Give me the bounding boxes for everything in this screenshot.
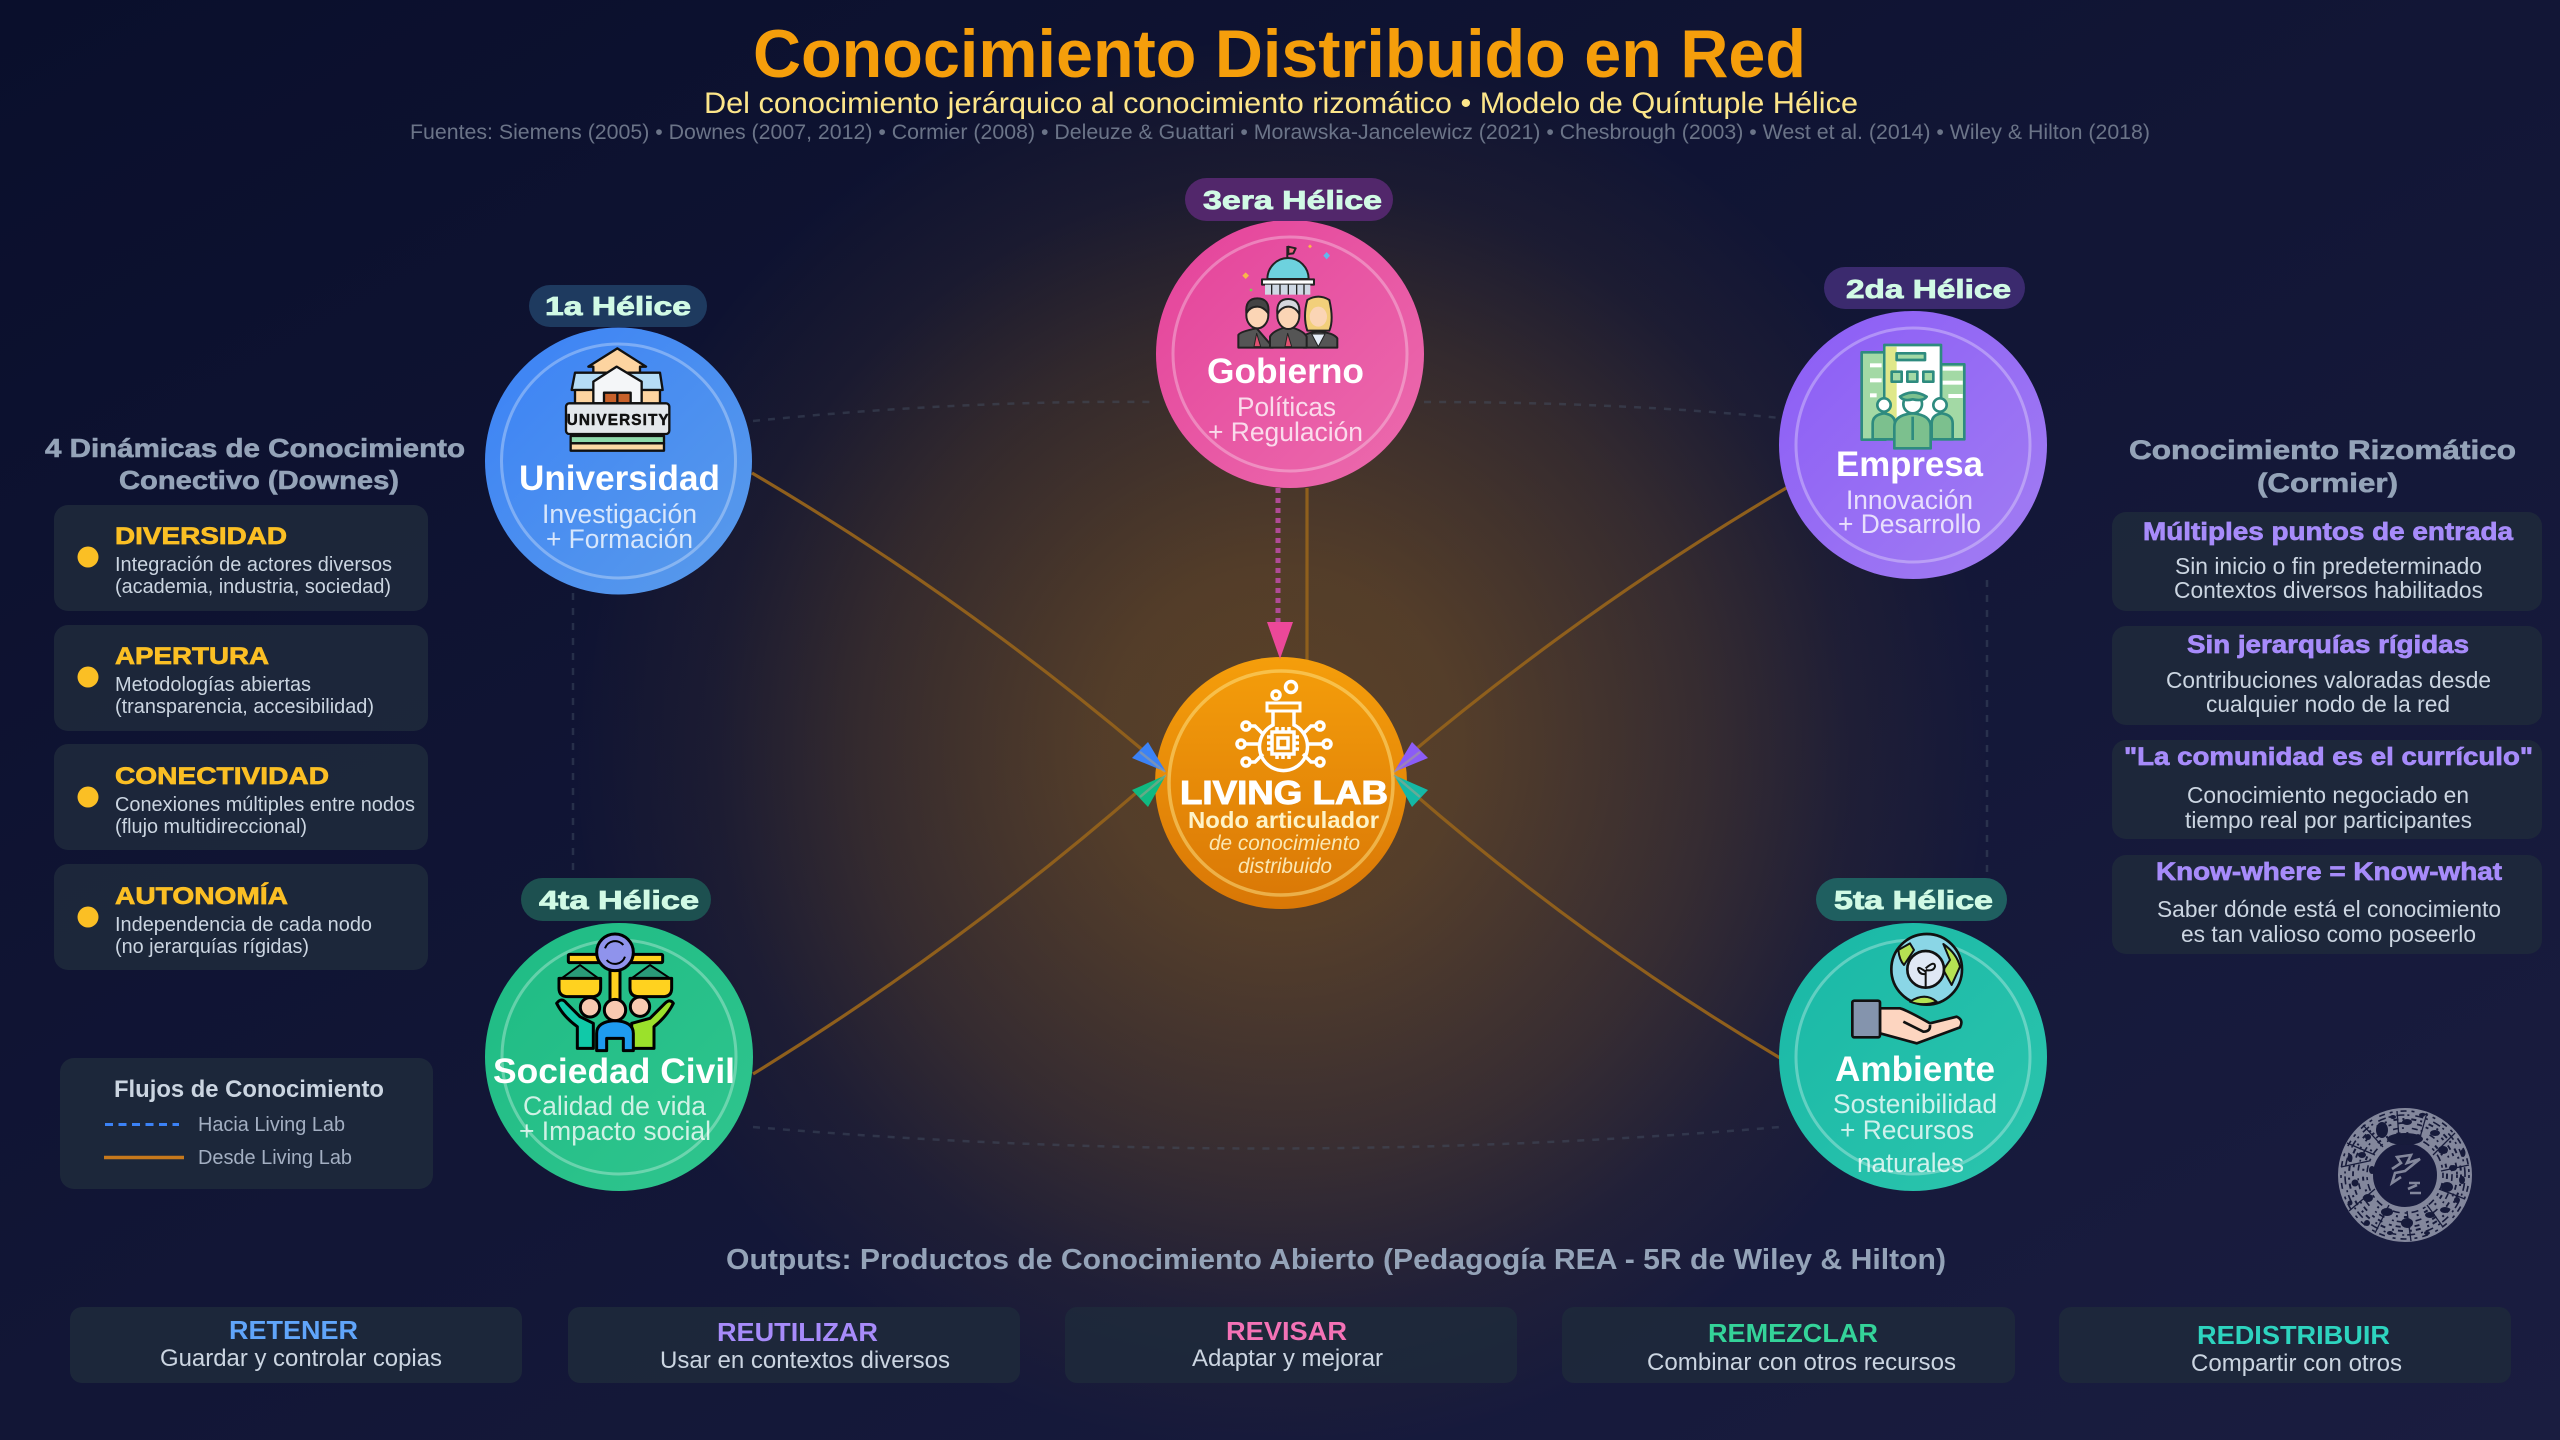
pill: 3era Hélice [1185,178,1393,221]
card: la comunidad: "La comunidad es el currículo" [2124,743,2533,771]
sublabel [1838,485,1981,539]
icon: university: UNIVERSITY [567,412,669,429]
card: apertura: (transparencia, accesibilidad) [115,696,374,718]
heading: Conectivo (Downes) [119,465,399,495]
heading: Conocimiento Rizomático [2129,435,2516,465]
card: sin jerarquías: cualquier nodo de la red [2206,691,2450,717]
sublabel: Políticas [1237,392,1336,422]
heading [2129,435,2516,498]
card: la comunidad [2112,740,2542,839]
sublabel: Sostenibilidad [1833,1089,1997,1119]
heading: Outputs: Productos de Conocimiento Abierto (Pedagogía REA - 5R de Wiley & Hilton) [726,1244,1946,1276]
card: retener [70,1307,522,1383]
sublabel: de conocimiento distribuido: de conocimiento [1209,832,1360,855]
dotted flow: Gobierno to Living Lab [1276,488,1280,625]
card: múltiples puntos [2112,512,2542,611]
node: Ambiente [1779,878,2047,1191]
subtitle: Del conocimiento jerárquico al conocimiento rizomático • Modelo de Quíntuple Hélice [704,87,1858,120]
title block [410,16,2150,144]
title: Conocimiento Distribuido en Red [753,16,1806,92]
legend: flujos: Flujos de Conocimiento [114,1076,384,1103]
label: Sociedad Civil: Sociedad Civil [493,1052,735,1091]
sublabel [1208,392,1363,447]
sublabel: de conocimiento distribuido [1209,832,1360,878]
arrow: Sociedad [1132,775,1166,807]
sublabel: Investigación [542,499,697,529]
card: revisar: Adaptar y mejorar [1192,1345,1383,1372]
icon: flask with chip [1237,682,1331,771]
arrows into Living Lab [1132,622,1428,807]
card: retener: Guardar y controlar copias [160,1345,442,1372]
card: remezclar: REMEZCLAR [1708,1318,1878,1348]
sources: Fuentes: Siemens (2005) • Downes (2007, 2012) • Cormier (2008) • Deleuze & Guattari • Morawska-Jancelewicz (2021) • Chesbrough (2003) • West et al. (2014) • Wiley & Hilton (2018) [410,121,2150,144]
pill: 5ta Hélice: 5ta Hélice [1834,885,1993,915]
card: sin jerarquías [2112,626,2542,725]
sublabel: nodo articulador: Nodo articulador [1188,807,1379,833]
card: redistribuir: Compartir con otros [2191,1350,2402,1377]
card: remezclar: Combinar con otros recursos [1647,1349,1956,1376]
label: Ambiente: Ambiente [1835,1050,1995,1089]
card: retener: RETENER [229,1315,358,1345]
node: Empresa [1779,267,2047,579]
card: apertura: Metodologías abiertas [115,674,311,696]
card: reutilizar: REUTILIZAR [717,1317,878,1347]
panel: 4 dinámicas [45,433,465,970]
icon: society [557,934,673,1051]
network: dotted links between helices [573,402,1987,1149]
card: sin jerarquías: Contribuciones valoradas desde [2166,667,2491,693]
sublabel: + Formación [546,524,693,554]
arrow: Ambiente [1394,775,1428,807]
node: Living Lab [1155,657,1407,909]
node: Gobierno [1156,178,1424,488]
card: apertura [54,625,428,731]
icon: environment [1852,934,1962,1043]
card: autonomía: Independencia de cada nodo [115,914,372,936]
icon: university [566,348,669,451]
sublabel: Calidad de vida [523,1091,707,1121]
card: know-where: es tan valioso como poseerlo [2181,921,2476,947]
arrow: Universidad [1132,742,1166,772]
node: Sociedad Civil [485,878,753,1191]
card: autonomía: AUTONOMÍA [115,882,288,910]
card: know-where: Know-where = Know-what [2156,858,2503,886]
sublabel [1833,1089,1997,1178]
heading: (Cormier) [2257,468,2398,498]
card: diversidad: DIVERSIDAD [115,523,287,550]
knowledge flow lines [752,473,1788,1074]
card: la comunidad: Conocimiento negociado en [2187,782,2469,808]
card: reutilizar: Usar en contextos diversos [660,1347,950,1374]
card: conectividad [54,744,428,850]
sublabel [519,1091,711,1146]
card: conectividad: Conexiones múltiples entre nodos [115,794,415,816]
sublabel: naturales [1857,1148,1964,1178]
heading [45,433,465,495]
pill: 2da Hélice [1824,267,2025,309]
card: conectividad: CONECTIVIDAD [115,763,329,790]
card: know-where [2112,855,2542,954]
pill: 4ta Hélice [521,878,711,921]
sublabel: de conocimiento distribuido: distribuido [1238,855,1332,878]
legend: flujos [60,1058,433,1189]
pill: 2da Hélice: 2da Hélice [1846,274,2011,304]
arrow: Gobierno [1267,622,1293,659]
pill: 3era Hélice: 3era Hélice [1203,185,1382,215]
card: apertura: APERTURA [115,643,269,670]
card: la comunidad: tiempo real por participantes [2185,807,2472,833]
node: Universidad [485,285,752,594]
label: Universidad: Universidad [519,459,720,498]
section: outputs [70,1244,2511,1383]
pill: 4ta Hélice: 4ta Hélice [539,885,699,915]
sublabel: + Desarrollo [1838,509,1981,539]
card: autonomía: (no jerarquías rígidas) [115,936,309,958]
legend: flujos: Hacia Living Lab [198,1114,345,1136]
card: diversidad: (academia, industria, sociedad) [115,576,391,598]
pill: 5ta Hélice [1816,878,2007,921]
icon: government [1238,244,1337,348]
card: revisar: REVISAR [1226,1316,1347,1346]
heading: 4 Dinámicas de Conocimiento [45,433,465,463]
card: reutilizar [568,1307,1020,1383]
sublabel: Innovación [1846,485,1973,515]
legend: flujos: Desde Living Lab [198,1147,352,1169]
card: diversidad [54,505,428,611]
card: diversidad: Integración de actores diversos [115,554,392,576]
sublabel: + Impacto social [519,1116,711,1146]
card: know-where: Saber dónde está el conocimiento [2157,896,2501,922]
arrow: Empresa [1394,742,1428,772]
label: Empresa: Empresa [1836,445,1984,484]
card: múltiples puntos: Sin inicio o fin predeterminado [2175,553,2482,579]
card: redistribuir [2059,1307,2511,1383]
card: revisar [1065,1307,1517,1383]
icon: network seal [2341,1111,2469,1241]
card: múltiples puntos: Múltiples puntos de entrada [2143,518,2514,546]
card: remezclar [1562,1307,2015,1383]
card: sin jerarquías: Sin jerarquías rígidas [2187,631,2469,659]
card: conectividad: (flujo multidireccional) [115,816,307,838]
label: LIVING LAB: LIVING LAB [1180,774,1388,811]
card: autonomía [54,864,428,970]
sublabel: + Regulación [1208,417,1363,447]
sublabel [542,499,697,554]
icon: company [1862,345,1964,448]
card: redistribuir: REDISTRIBUIR [2197,1320,2390,1350]
label: Gobierno: Gobierno [1207,352,1364,391]
pill: 1a Hélice: 1a Hélice [545,291,691,321]
panel: conocimiento rizomático [2112,435,2542,954]
pill: 1a Hélice [529,285,707,327]
sublabel: + Recursos [1840,1115,1974,1145]
card: múltiples puntos: Contextos diversos habilitados [2174,577,2483,603]
